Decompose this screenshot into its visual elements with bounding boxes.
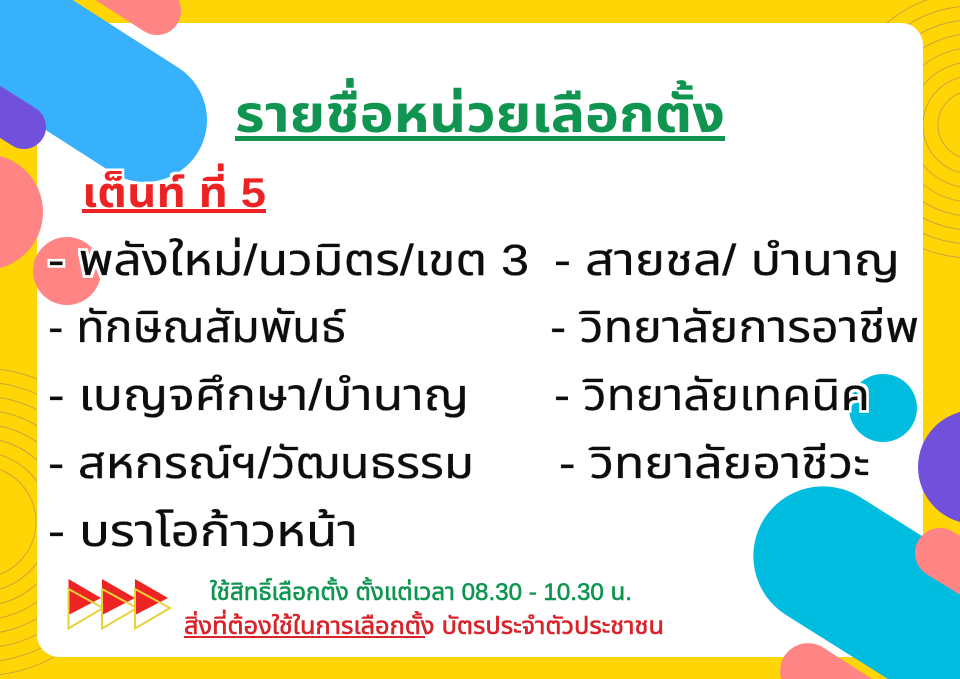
shape: large pink circle (0, 154, 43, 270)
shape: top pink capsule (90, 0, 157, 11)
list: left column: - บราโอก้าวหน้า (48, 507, 358, 556)
list: right column: - สายชล/ บำนาญ (554, 236, 900, 285)
title: รายชื่อหน่วยเลือกตั้ง (235, 78, 725, 144)
shape: cyan circle (849, 374, 917, 442)
list: left column: - เบญจศึกษา/บำนาญ (48, 371, 469, 420)
shape: right pink capsule (940, 553, 960, 590)
subheading: tent 5: เต็นท์ ที่ 5 (82, 163, 266, 216)
footer: required documents: สิ่งที่ต้องใช้ในการเลือกตั้ง บัตรประจำตัวประชาชน (184, 609, 664, 640)
shape: right purple circle (918, 410, 960, 524)
shape: purple capsule (0, 80, 24, 127)
list: left column: - สหกรณ์ฯ/วัฒนธรรม (48, 439, 474, 488)
rings: bottom left (0, 368, 134, 676)
shape: bottom pink capsule (780, 643, 872, 679)
shape: blue capsule (0, 0, 145, 120)
shape: small pink circle (33, 237, 101, 305)
footer: voting time: ใช้สิทธิ์เลือกตั้ง ตั้งแต่เวลา 08.30 - 10.30 น. (210, 576, 632, 606)
list: right column: - วิทยาลัยการอาชีพ (550, 303, 919, 352)
rings: top right (839, 0, 960, 258)
list: left column: - พลังใหม่/นวมิตร/เขต 3 (48, 236, 529, 285)
icon: triple arrows (68, 579, 170, 628)
shape: large cyan capsule (753, 486, 960, 679)
list: left column (48, 236, 529, 556)
list: right column (550, 236, 919, 488)
list: left column: - ทักษิณสัมพันธ์ (48, 303, 346, 352)
list: right column: - วิทยาลัยเทคนิค (554, 371, 870, 420)
list: right column: - วิทยาลัยอาชีวะ (559, 439, 870, 488)
